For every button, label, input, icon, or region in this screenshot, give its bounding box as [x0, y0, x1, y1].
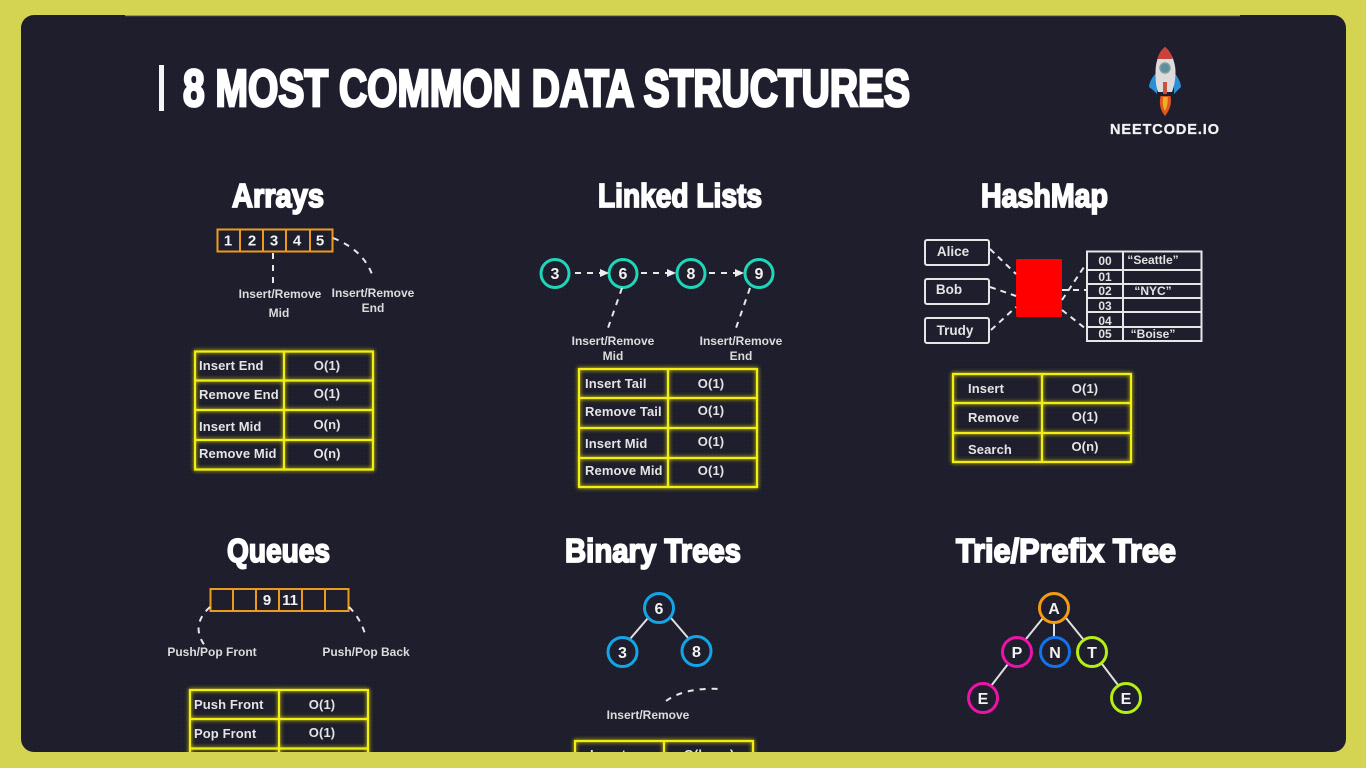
- table: arrays complexity: Insert Mid: [199, 419, 261, 434]
- heading: hashmap: HashMap: [981, 177, 1108, 214]
- heading: binary trees: Binary Trees: [565, 532, 741, 569]
- hashmap diagram: Alice: [937, 244, 970, 259]
- binary tree diagram: 3: [618, 645, 627, 662]
- table: linked list complexity: O(1): [698, 403, 724, 418]
- hashmap diagram: 05: [1098, 327, 1112, 341]
- array diagram: 5: [316, 232, 324, 250]
- title: [159, 65, 910, 111]
- hashmap diagram: Trudy: [937, 323, 974, 338]
- table: hashmap complexity: Insert: [968, 381, 1005, 396]
- table: linked list complexity: Insert Mid: [585, 436, 647, 451]
- binary tree diagram: [607, 594, 722, 722]
- trie diagram: E: [978, 691, 989, 708]
- linked list diagram: [541, 260, 783, 363]
- table: hashmap complexity: O(1): [1072, 381, 1098, 396]
- array diagram: 1: [224, 232, 232, 250]
- binary tree diagram: 8: [692, 644, 701, 661]
- table: linked list complexity: O(1): [698, 376, 724, 391]
- table: queue complexity: Pop Front: [194, 726, 257, 741]
- panel: trie: [956, 532, 1176, 712]
- table: queue complexity: [186, 686, 372, 752]
- array diagram: Insert/Remove: [239, 287, 322, 301]
- array diagram: Mid: [269, 306, 289, 320]
- hashmap diagram: “Seattle”: [1127, 253, 1179, 267]
- table: linked list complexity: Remove Mid: [585, 463, 663, 478]
- linked list diagram: Mid: [603, 349, 623, 363]
- table: linked list complexity: Insert Tail: [585, 376, 647, 391]
- table: linked list complexity: Remove Tail: [585, 404, 662, 419]
- trie diagram: E: [1121, 691, 1132, 708]
- heading: arrays: Arrays: [232, 177, 324, 214]
- queue diagram: Push/Pop Front: [167, 645, 257, 659]
- panel: queues: [167, 532, 410, 768]
- logo: NeetCode rocket: NEETCODE.IO: [1110, 122, 1219, 138]
- table: queue complexity: Push Front: [194, 697, 264, 712]
- array diagram: Insert/Remove: [332, 286, 415, 300]
- array diagram: 3: [270, 232, 278, 250]
- linked list diagram: 6: [619, 266, 628, 283]
- panel: hashmap: [925, 177, 1202, 462]
- hashmap diagram: 04: [1098, 314, 1112, 328]
- table: binary tree complexity: Insert: [590, 747, 627, 762]
- trie diagram: [968, 594, 1140, 712]
- linked list diagram: Insert/Remove: [572, 334, 655, 348]
- table: arrays complexity: Remove End: [199, 387, 279, 402]
- table: linked list complexity: O(1): [698, 434, 724, 449]
- table: arrays complexity: O(n): [313, 446, 341, 461]
- heading: trie: Trie/Prefix Tree: [956, 532, 1176, 569]
- linked list diagram: 9: [755, 266, 764, 283]
- table: hashmap complexity: [953, 374, 1131, 462]
- hashmap diagram: [925, 240, 1202, 343]
- linked list diagram: 8: [687, 266, 696, 283]
- trie diagram: P: [1012, 645, 1023, 662]
- linked list diagram: 3: [551, 266, 560, 283]
- hashmap diagram: Bob: [936, 282, 962, 297]
- hashmap diagram: 00: [1098, 254, 1112, 268]
- trie diagram: A: [1048, 601, 1060, 618]
- logo: NeetCode rocket: [1110, 47, 1219, 138]
- table: hashmap complexity: Remove: [968, 410, 1019, 425]
- table: binary tree complexity: [570, 736, 758, 752]
- table: arrays complexity: O(n): [313, 417, 341, 432]
- array diagram: [218, 229, 415, 320]
- table: queue complexity: O(1): [309, 725, 335, 740]
- heading: linked lists: Linked Lists: [598, 177, 762, 214]
- hashmap diagram: 02: [1098, 284, 1112, 298]
- trie diagram: N: [1049, 645, 1061, 662]
- binary tree diagram: Insert/Remove: [607, 708, 690, 722]
- table: binary tree complexity: O(log n): [684, 747, 734, 762]
- array diagram: End: [362, 301, 384, 315]
- panel: arrays: [195, 177, 415, 470]
- table: linked list complexity: O(1): [698, 463, 724, 478]
- hashmap diagram: 01: [1098, 270, 1112, 284]
- table: arrays complexity: O(1): [314, 358, 340, 373]
- table: queue complexity: O(1): [309, 697, 335, 712]
- table: arrays complexity: Remove Mid: [199, 446, 277, 461]
- table: linked list complexity: [579, 369, 757, 487]
- trie diagram: T: [1087, 645, 1097, 662]
- table: hashmap complexity: O(n): [1071, 439, 1099, 454]
- queue diagram: Push/Pop Back: [322, 645, 410, 659]
- linked list diagram: Insert/Remove: [700, 334, 783, 348]
- panel: linked lists: [541, 177, 783, 487]
- title: 8 MOST COMMON DATA STRUCTURES: [183, 60, 910, 118]
- panel: binary trees: [565, 532, 753, 768]
- table: hashmap complexity: O(1): [1072, 409, 1098, 424]
- table: arrays complexity: O(1): [314, 386, 340, 401]
- linked list diagram: End: [730, 349, 752, 363]
- queue diagram: 9: [263, 592, 271, 609]
- queue diagram: 11: [282, 592, 298, 609]
- table: arrays complexity: Insert End: [199, 358, 264, 373]
- heading: queues: Queues: [227, 532, 330, 569]
- table: arrays complexity: [195, 352, 373, 470]
- hashmap diagram: “NYC”: [1134, 284, 1172, 298]
- hashmap diagram: 03: [1098, 299, 1112, 313]
- array diagram: 2: [248, 232, 256, 250]
- hashmap diagram: “Boise”: [1131, 327, 1175, 341]
- array diagram: 4: [293, 232, 302, 250]
- queue diagram: [167, 589, 410, 659]
- binary tree diagram: 6: [655, 601, 664, 618]
- table: hashmap complexity: Search: [968, 442, 1012, 457]
